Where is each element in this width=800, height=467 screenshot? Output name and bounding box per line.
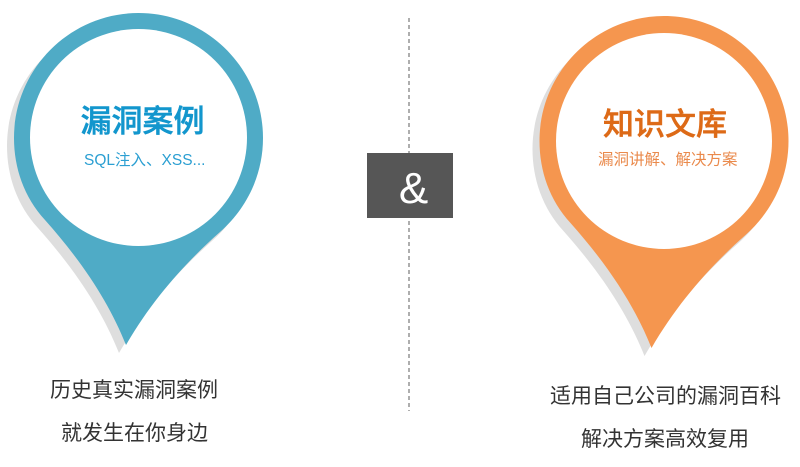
ampersand box	[367, 153, 453, 218]
pin body: orange	[540, 16, 788, 348]
text block: left caption: 就发生在你身边	[61, 422, 208, 445]
heading: 漏洞案例: 漏洞案例	[80, 104, 204, 139]
panel: blue pin	[7, 13, 263, 353]
heading: 知识文库: 知识文库	[603, 107, 727, 142]
subheading: SQL注入、XSS: SQL注入、XSS...	[84, 151, 205, 169]
panel: orange pin	[532, 16, 788, 356]
pin inner circle: blue	[30, 29, 247, 246]
text block: right caption: 解决方案高效复用	[581, 428, 749, 451]
center dashed divider	[408, 18, 410, 411]
pin inner circle: orange	[556, 33, 772, 249]
subheading: 漏洞讲解、解决方案: 漏洞讲解、解决方案	[598, 150, 738, 168]
ampersand symbol: &	[399, 164, 428, 213]
text block: right caption: 适用自己公司的漏洞百科	[550, 385, 781, 408]
text block: right caption	[550, 385, 781, 451]
pin shadow: blue	[7, 21, 256, 353]
text block: left caption: 历史真实漏洞案例	[50, 379, 218, 402]
text block: left caption	[50, 379, 218, 445]
pin shadow: orange	[532, 24, 782, 356]
pin body: blue	[14, 13, 263, 345]
